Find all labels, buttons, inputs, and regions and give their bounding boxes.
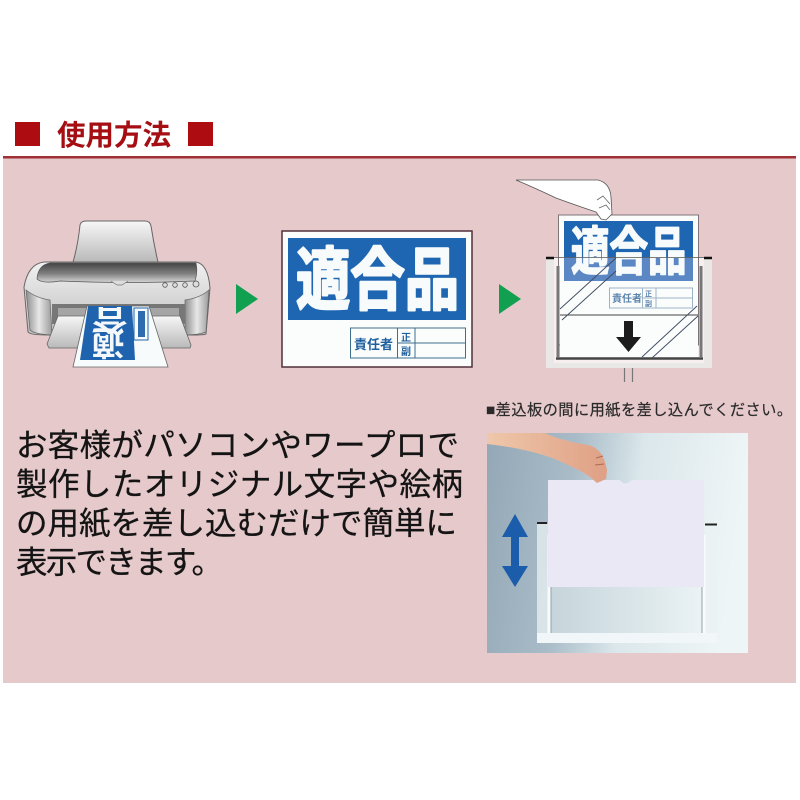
clear holder: [537, 523, 717, 643]
icon: printer: [24, 221, 210, 367]
holder frame: [546, 257, 712, 368]
body text: [16, 427, 463, 580]
heading: 使用方法: 使用方法: [57, 120, 171, 152]
illustration: sheet inserted in holder: 適合品: [571, 223, 686, 281]
inserted sheet: [558, 215, 698, 345]
printed sheet: 適: [92, 324, 124, 361]
responsible-person table: 責任者: [354, 337, 393, 352]
panel: pink background: [3, 157, 796, 683]
icon: blue double arrow: [502, 514, 528, 587]
sign: printed sheet: [282, 231, 472, 367]
body text: の用紙を差し込むだけで簡単に: [16, 505, 457, 541]
body text: 製作したオリジナル文字や絵柄: [16, 466, 463, 502]
glare lines: [560, 258, 698, 358]
sign: printed sheet: 適合品: [296, 243, 459, 319]
small table: [610, 288, 692, 308]
responsible-person table: 副: [401, 346, 411, 358]
holder post: [624, 368, 632, 382]
icon: hand: [487, 433, 607, 483]
printed sheet: [73, 304, 168, 367]
small table: 責任者: [612, 292, 642, 305]
small table: 副: [645, 299, 652, 308]
paper: [548, 480, 704, 587]
responsible-person table: 正: [401, 332, 411, 344]
body text: 表示できます。: [16, 544, 223, 580]
heading rule: [3, 156, 796, 158]
illustration: sheet inserted in holder: [516, 180, 712, 382]
icon: hand: [516, 180, 612, 220]
arrow: printer to sign: [236, 284, 258, 314]
photo: inserting paper into holder: [487, 433, 748, 653]
icon: down arrow: [616, 321, 641, 352]
caption: ■差込板の間に用紙を差し込んでください。: [486, 402, 792, 419]
small table: 正: [645, 290, 652, 298]
heading: 使用方法: [15, 120, 213, 152]
responsible-person table: [350, 328, 466, 358]
body text: お客様がパソコンやワープロで: [16, 427, 459, 463]
printed sheet: 合: [92, 304, 127, 336]
arrow: sign to holder: [499, 284, 521, 314]
